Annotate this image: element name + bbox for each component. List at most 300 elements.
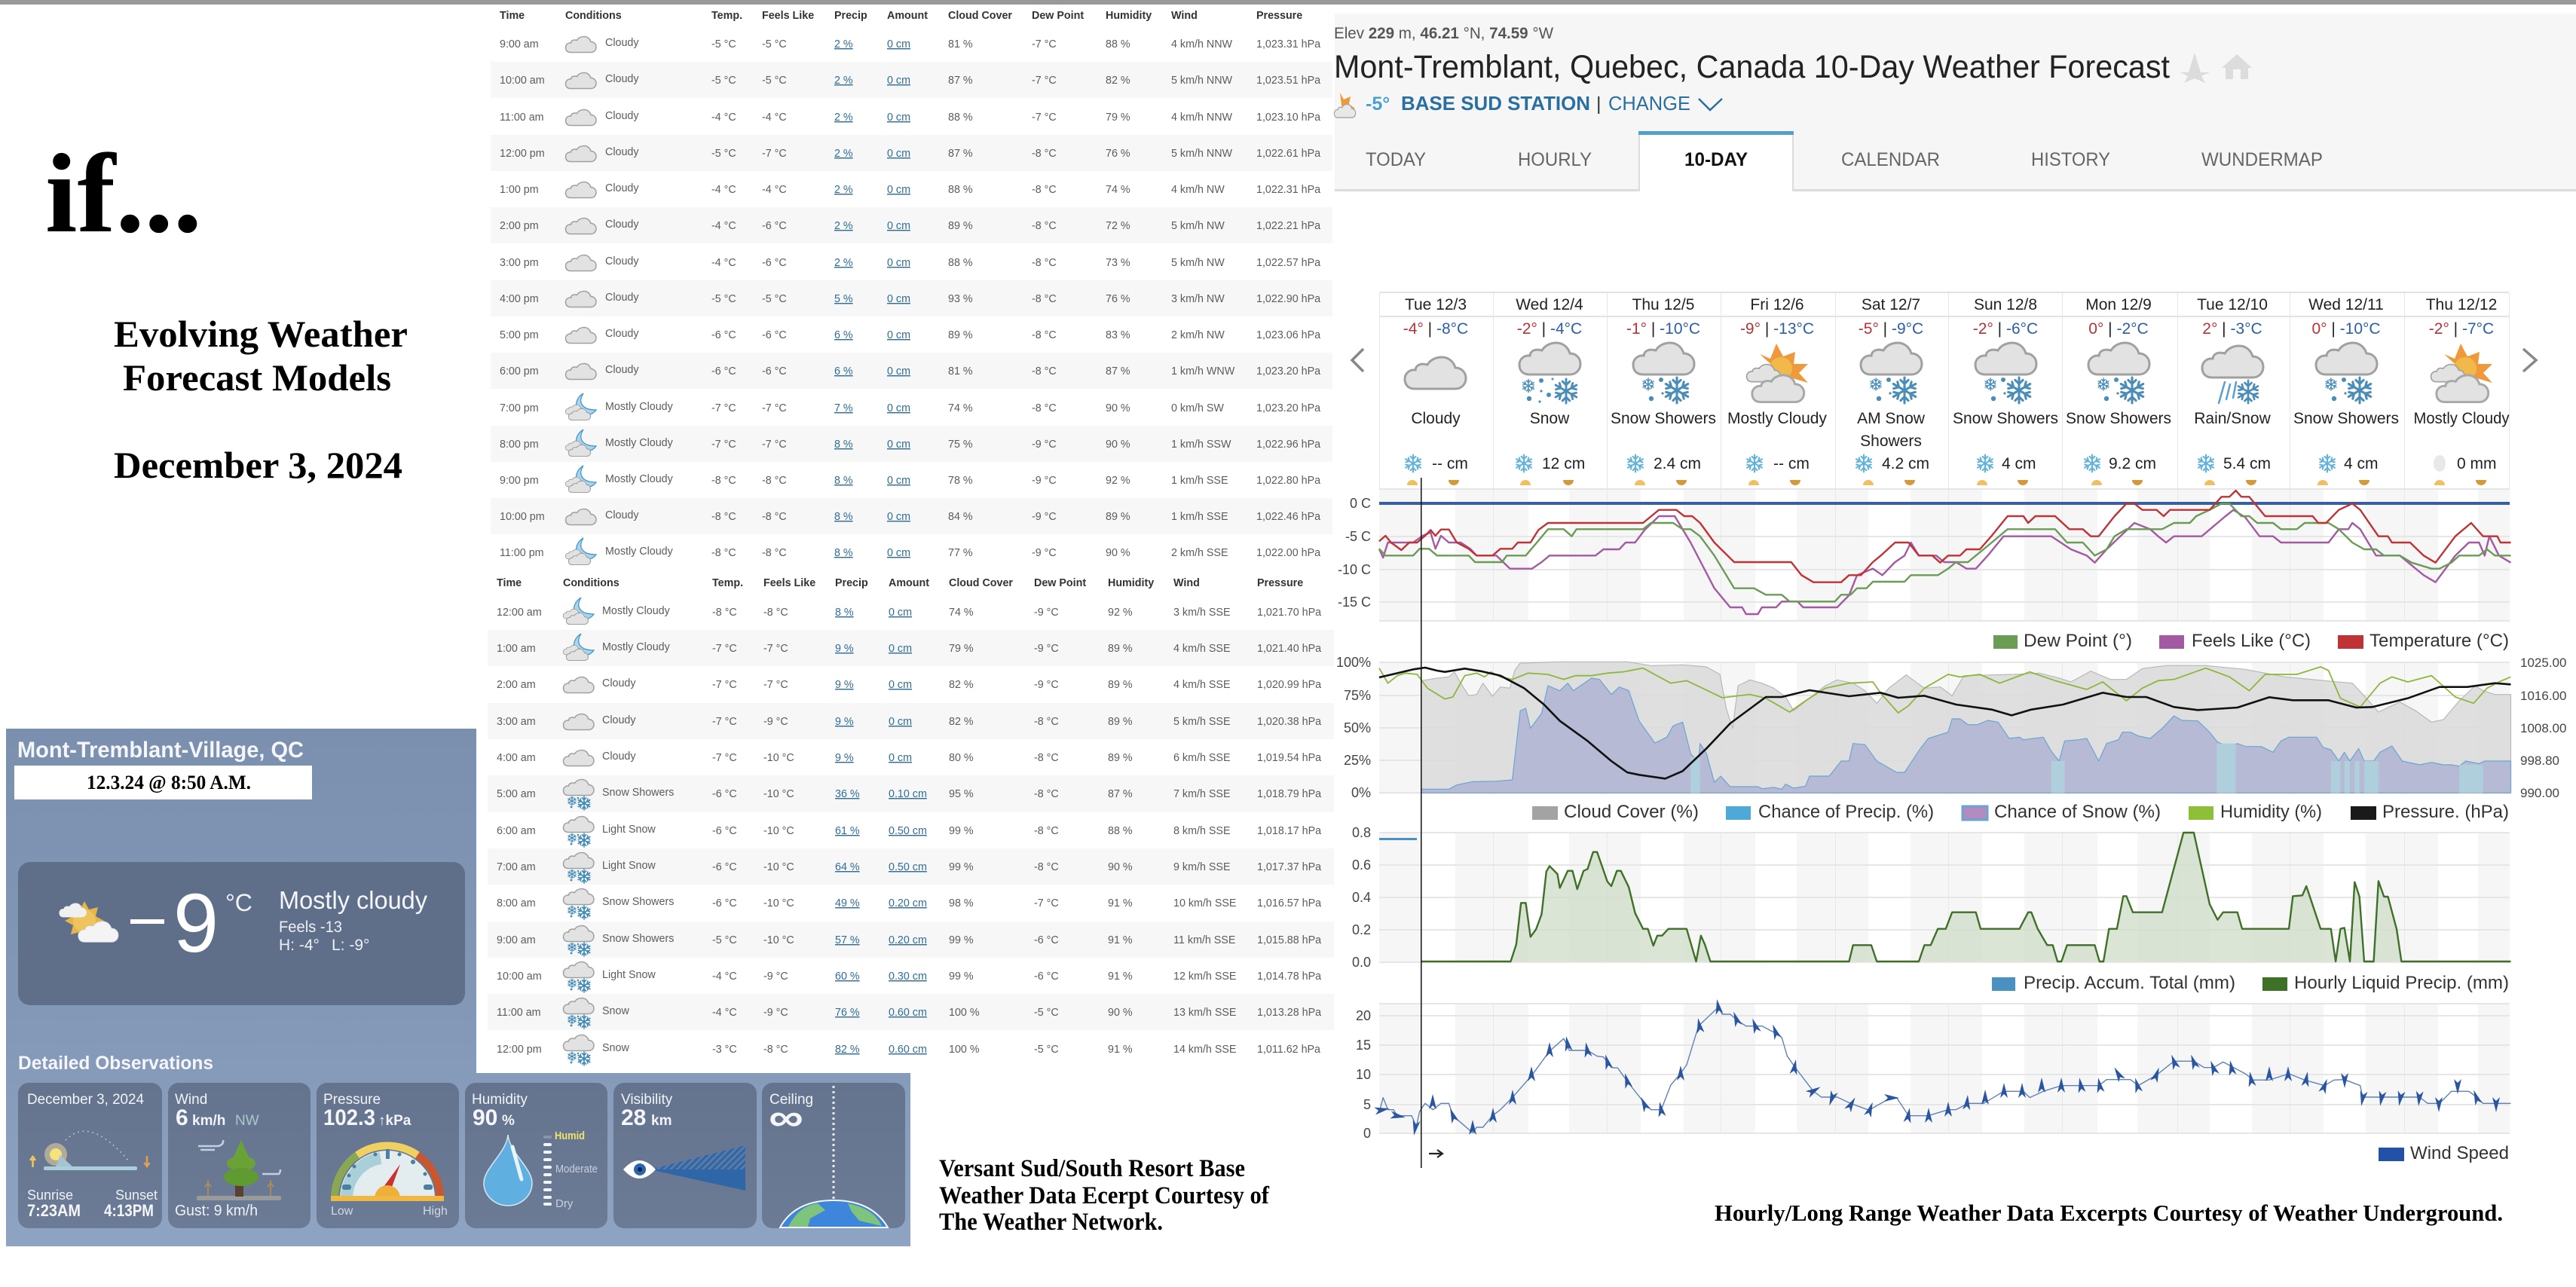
hourly rows 9 am to 11 pm: 2 % bbox=[834, 184, 853, 196]
hourly rows 9 am to 11 pm: -4 °C bbox=[762, 184, 787, 196]
hourly rows 9 am to 11 pm: 77 % bbox=[948, 547, 973, 559]
snow accumulation: 5.4 cm bbox=[2223, 455, 2271, 472]
cloud, precipitation, humidity and pressure chart bbox=[1336, 655, 2566, 822]
hourly rows 12 am to 12 pm: 7:00 am bbox=[497, 861, 536, 873]
hourly rows 12 am to 12 pm: 1,020.38 hPa bbox=[1257, 716, 1321, 728]
hourly rows 9 am to 11 pm: 2 % bbox=[834, 38, 853, 50]
hourly rows 9 am to 11 pm: 72 % bbox=[1106, 220, 1130, 232]
hourly rows 12 am to 12 pm: -9 °C bbox=[763, 971, 788, 983]
heading: Evolving Weather Forecast Models bbox=[114, 313, 408, 399]
high and low temperatures: 2° | -3°C bbox=[2202, 320, 2262, 338]
hourly rows 9 am to 11 pm: 5 km/h NW bbox=[1171, 257, 1225, 269]
high and low temperatures: -9° | -13°C bbox=[1740, 320, 1814, 338]
hourly rows 9 am to 11 pm: 9:00 am bbox=[500, 38, 539, 50]
hourly rows 9 am to 11 pm: 1 km/h SSE bbox=[1171, 475, 1228, 487]
hourly rows 9 am to 11 pm: 78 % bbox=[948, 475, 973, 487]
table header row: Feels Like bbox=[762, 10, 814, 22]
axis labels: -15 C bbox=[1338, 595, 1371, 610]
hourly rows 9 am to 11 pm: 73 % bbox=[1106, 257, 1130, 269]
hourly rows 12 am to 12 pm: 90 % bbox=[1108, 1007, 1133, 1019]
hourly rows 9 am to 11 pm: 11:00 am bbox=[500, 112, 544, 124]
hourly rows 12 am to 12 pm: 0.20 cm bbox=[889, 934, 927, 946]
hourly rows 9 am to 11 pm: 76 % bbox=[1106, 293, 1130, 305]
second table header row: Conditions bbox=[563, 577, 620, 589]
hourly rows 9 am to 11 pm: 81 % bbox=[948, 38, 973, 50]
hourly rows 12 am to 12 pm: -9 °C bbox=[1034, 679, 1059, 691]
hourly rows 9 am to 11 pm: 1,023.51 hPa bbox=[1256, 75, 1320, 87]
hourly rows 12 am to 12 pm: -8 °C bbox=[1034, 788, 1059, 800]
card: sunrise and sunset: 7:23AM bbox=[27, 1201, 81, 1220]
card: pressure: ↑kPa bbox=[378, 1113, 411, 1129]
hourly rows 12 am to 12 pm: 87 % bbox=[1108, 788, 1133, 800]
hourly rows 9 am to 11 pm: -7 °C bbox=[762, 402, 787, 414]
hourly rows 12 am to 12 pm: -6 °C bbox=[712, 788, 737, 800]
hourly rows 9 am to 11 pm: 1,023.20 hPa bbox=[1256, 402, 1320, 414]
hourly rows 9 am to 11 pm: -8 °C bbox=[762, 511, 787, 523]
high and low temperatures: 0° | -10°C bbox=[2311, 320, 2381, 338]
cloud and precipitation legend bbox=[1532, 802, 2509, 822]
hourly rows 12 am to 12 pm: 0.60 cm bbox=[889, 1007, 927, 1019]
hourly rows 9 am to 11 pm: 9:00 pm bbox=[500, 475, 539, 487]
hourly rows 9 am to 11 pm: 2 % bbox=[834, 75, 853, 87]
hourly rows 9 am to 11 pm: -7 °C bbox=[1032, 75, 1057, 87]
hourly rows 9 am to 11 pm: 4 km/h NW bbox=[1171, 184, 1225, 196]
hourly rows 9 am to 11 pm: 0 cm bbox=[887, 329, 910, 341]
hourly rows 9 am to 11 pm: 93 % bbox=[948, 293, 973, 305]
high and low: H: -4° bbox=[279, 937, 320, 954]
hourly rows 12 am to 12 pm: 95 % bbox=[949, 788, 974, 800]
hourly rows 12 am to 12 pm: -10 °C bbox=[763, 861, 794, 873]
axis labels bbox=[1352, 825, 1371, 970]
hourly rows 12 am to 12 pm: 49 % bbox=[835, 897, 860, 909]
hourly rows 12 am to 12 pm: 8 % bbox=[835, 607, 854, 619]
hourly rows 12 am to 12 pm: 89 % bbox=[1108, 716, 1133, 728]
hourly rows 9 am to 11 pm: Cloudy bbox=[605, 73, 639, 85]
hourly rows 12 am to 12 pm: Snow Showers bbox=[602, 933, 674, 945]
hourly rows 9 am to 11 pm: -7 °C bbox=[1032, 112, 1057, 124]
right axis labels: 990.00 bbox=[2520, 786, 2559, 800]
heading: Detailed Observations: Detailed Observations bbox=[18, 1053, 213, 1074]
table header row: Temp. bbox=[711, 10, 742, 22]
hourly rows 9 am to 11 pm: Cloudy bbox=[605, 364, 639, 376]
second table header row: Amount bbox=[889, 577, 929, 589]
hourly rows 9 am to 11 pm: 88 % bbox=[1106, 38, 1130, 50]
hourly rows 9 am to 11 pm: -8 °C bbox=[1032, 257, 1057, 269]
hourly rows 9 am to 11 pm: 89 % bbox=[1106, 511, 1130, 523]
axis labels: 10 bbox=[1356, 1067, 1371, 1082]
hourly rows 9 am to 11 pm: 5 km/h NNW bbox=[1171, 148, 1233, 160]
hourly rows 9 am to 11 pm: -9 °C bbox=[1032, 475, 1057, 487]
accumulation mark bbox=[1379, 838, 1417, 840]
hourly rows 9 am to 11 pm: 5 % bbox=[834, 293, 853, 305]
table header row: Dew Point bbox=[1032, 10, 1084, 22]
condition labels: AM Snow bbox=[1857, 410, 1926, 427]
hourly rows 9 am to 11 pm: 88 % bbox=[948, 112, 973, 124]
hourly rows 9 am to 11 pm: 1,022.31 hPa bbox=[1256, 184, 1320, 196]
hourly rows 9 am to 11 pm: 81 % bbox=[948, 365, 973, 378]
temperature legend: Dew Point (°) bbox=[2024, 631, 2132, 651]
hourly rows 12 am to 12 pm: 99 % bbox=[949, 825, 974, 837]
data lines bbox=[1379, 491, 2510, 614]
hourly rows 12 am to 12 pm: 82 % bbox=[949, 679, 974, 691]
header: Weather Underground location bar bbox=[1334, 14, 2576, 196]
axis labels: 0.0 bbox=[1352, 955, 1371, 970]
card: wind: km/h bbox=[192, 1113, 225, 1129]
heading: Evolving Weather Forecast Models: Forecast Models bbox=[123, 356, 391, 399]
hourly rows 12 am to 12 pm: 2:00 am bbox=[497, 679, 536, 691]
hourly rows 12 am to 12 pm: 11:00 am bbox=[497, 1007, 541, 1019]
hourly rows 9 am to 11 pm: 0 cm bbox=[887, 365, 910, 378]
table header row: Time bbox=[500, 10, 525, 22]
hourly rows 9 am to 11 pm: 2 km/h NW bbox=[1171, 329, 1225, 341]
hourly rows 9 am to 11 pm: 1 km/h SSE bbox=[1171, 511, 1228, 523]
icon: earth dome bbox=[780, 1200, 888, 1227]
hourly rows 9 am to 11 pm: Cloudy bbox=[605, 182, 639, 194]
hourly rows 9 am to 11 pm: -8 °C bbox=[1032, 220, 1057, 232]
hourly rows 12 am to 12 pm: Cloudy bbox=[602, 677, 636, 689]
hourly rows 9 am to 11 pm: 11:00 pm bbox=[500, 547, 544, 559]
hourly rows 12 am to 12 pm: 10 km/h SSE bbox=[1173, 897, 1236, 909]
hourly rows 9 am to 11 pm: 76 % bbox=[1106, 148, 1130, 160]
hourly rows 9 am to 11 pm: 10:00 pm bbox=[500, 511, 545, 523]
hourly rows 9 am to 11 pm: 1,022.57 hPa bbox=[1256, 257, 1320, 269]
hourly rows 9 am to 11 pm: 89 % bbox=[948, 329, 973, 341]
second table header row: Dew Point bbox=[1034, 577, 1086, 589]
hourly rows 9 am to 11 pm: -4 °C bbox=[711, 112, 736, 124]
right axis labels: 1025.00 bbox=[2520, 656, 2566, 670]
date heading: December 3, 2024 bbox=[114, 444, 402, 486]
hourly rows 9 am to 11 pm: 6 % bbox=[834, 329, 853, 341]
hourly rows 12 am to 12 pm: 0.60 cm bbox=[889, 1044, 927, 1056]
hourly rows 12 am to 12 pm: 82 % bbox=[949, 716, 974, 728]
sunrise and sunset markers bbox=[1407, 480, 2486, 485]
hourly rows 9 am to 11 pm: -7 °C bbox=[711, 439, 736, 451]
hourly rows 9 am to 11 pm: 2 % bbox=[834, 112, 853, 124]
table header row: Humidity bbox=[1106, 10, 1152, 22]
hourly rows 12 am to 12 pm: Snow Showers bbox=[602, 787, 674, 799]
hourly rows 12 am to 12 pm: 89 % bbox=[1108, 643, 1133, 655]
panel caption: Weather Data Ecerpt Courtesy of bbox=[939, 1182, 1270, 1209]
left axis labels bbox=[1336, 655, 1371, 800]
hourly rows 12 am to 12 pm: 5 km/h SSE bbox=[1173, 716, 1230, 728]
axis labels: 0.8 bbox=[1352, 825, 1371, 840]
hourly rows 12 am to 12 pm: Cloudy bbox=[602, 750, 636, 763]
hourly rows 9 am to 11 pm: 92 % bbox=[1106, 475, 1130, 487]
hourly rows 12 am to 12 pm: -5 °C bbox=[1034, 1044, 1059, 1056]
card: wind bbox=[168, 1083, 311, 1228]
hourly rows 12 am to 12 pm: 99 % bbox=[949, 971, 974, 983]
hourly rows 12 am to 12 pm: 0.50 cm bbox=[889, 825, 927, 837]
hourly rows 9 am to 11 pm: Mostly Cloudy bbox=[605, 437, 674, 449]
hourly rows 9 am to 11 pm: 1,022.61 hPa bbox=[1256, 148, 1320, 160]
hourly rows 12 am to 12 pm: -3 °C bbox=[712, 1044, 737, 1056]
second table header row: Precip bbox=[835, 577, 868, 589]
hourly rows 9 am to 11 pm: -8 °C bbox=[1032, 365, 1057, 378]
hourly rows 12 am to 12 pm: -10 °C bbox=[763, 825, 794, 837]
hourly rows 9 am to 11 pm: 87 % bbox=[1106, 365, 1130, 378]
hourly rows 12 am to 12 pm: 91 % bbox=[1108, 934, 1133, 946]
hourly rows 9 am to 11 pm: 1,022.46 hPa bbox=[1256, 511, 1320, 523]
hourly rows 9 am to 11 pm: 7 % bbox=[834, 402, 853, 414]
condition labels bbox=[1411, 410, 2510, 450]
hourly rows 12 am to 12 pm: 1:00 am bbox=[497, 643, 536, 655]
tabs: HISTORY bbox=[2031, 149, 2110, 170]
feels like line bbox=[1379, 510, 2510, 614]
condition labels: Mostly Cloudy bbox=[1727, 410, 1827, 427]
hourly rows 12 am to 12 pm: 1,015.88 hPa bbox=[1257, 934, 1321, 946]
hourly rows 9 am to 11 pm: -5 °C bbox=[711, 38, 736, 50]
top grey bar bbox=[0, 0, 2576, 5]
station line: BASE SUD STATION bbox=[1401, 92, 1590, 115]
hourly rows 12 am to 12 pm: 64 % bbox=[835, 861, 860, 873]
condition labels: Snow Showers bbox=[2293, 410, 2399, 427]
hourly rows 12 am to 12 pm: 1,014.78 hPa bbox=[1257, 971, 1321, 983]
hourly rows 12 am to 12 pm: 9 % bbox=[835, 716, 854, 728]
snow accumulation bbox=[1404, 455, 2496, 472]
chance of snow area bbox=[1421, 678, 2510, 793]
hourly rows 12 am to 12 pm: 6 km/h SSE bbox=[1173, 752, 1230, 764]
station line: | bbox=[1596, 93, 1601, 115]
hourly rows 9 am to 11 pm: 1,022.00 hPa bbox=[1256, 547, 1320, 559]
hourly rows 9 am to 11 pm: Mostly Cloudy bbox=[605, 546, 674, 558]
hourly rows 9 am to 11 pm: 6 % bbox=[834, 365, 853, 378]
second table header row: Temp. bbox=[712, 577, 743, 589]
hourly rows 9 am to 11 pm: -5 °C bbox=[762, 75, 787, 87]
condition icons bbox=[565, 36, 596, 564]
second table condition icons bbox=[563, 598, 594, 1065]
hourly rows 9 am to 11 pm: 1,022.90 hPa bbox=[1256, 293, 1320, 305]
hourly rows 12 am to 12 pm: 1,021.40 hPa bbox=[1257, 643, 1321, 655]
day labels: Sun 12/8 bbox=[1974, 296, 2037, 313]
hourly rows 12 am to 12 pm: -6 °C bbox=[712, 897, 737, 909]
pressure line bbox=[1379, 668, 2510, 778]
hourly rows 9 am to 11 pm: Mostly Cloudy bbox=[605, 473, 674, 485]
card: pressure: 102.3 bbox=[323, 1105, 375, 1130]
hourly rows 12 am to 12 pm: Snow Showers bbox=[602, 896, 674, 908]
hourly rows 12 am to 12 pm: Light Snow bbox=[602, 860, 656, 872]
hourly rows 9 am to 11 pm: 10:00 am bbox=[500, 75, 545, 87]
condition labels: Cloudy bbox=[1411, 410, 1461, 427]
hourly rows 9 am to 11 pm: Cloudy bbox=[605, 328, 639, 340]
card: wind: Wind bbox=[175, 1092, 207, 1108]
high and low temperatures bbox=[1403, 320, 2494, 338]
right axis labels bbox=[2520, 656, 2566, 800]
hourly rows 9 am to 11 pm: 12:00 pm bbox=[500, 148, 545, 160]
hourly rows 12 am to 12 pm: 8:00 am bbox=[497, 897, 536, 909]
hourly rows 9 am to 11 pm: 0 cm bbox=[887, 547, 910, 559]
hourly rows 12 am to 12 pm: 60 % bbox=[835, 971, 860, 983]
second table row bands bbox=[488, 630, 1334, 1030]
hourly rows 9 am to 11 pm: 1 km/h WNW bbox=[1171, 365, 1235, 378]
cloud and precipitation legend: Pressure. (hPa) bbox=[2382, 802, 2509, 822]
elevation line: Elev 229 m, 46.21 °N, 74.59 °W bbox=[1334, 25, 1553, 42]
hourly rows 9 am to 11 pm: 1,023.10 hPa bbox=[1256, 112, 1320, 124]
hourly rows 12 am to 12 pm: 9 km/h SSE bbox=[1173, 861, 1230, 873]
hourly rows 12 am to 12 pm: -9 °C bbox=[1034, 643, 1059, 655]
hourly rows 12 am to 12 pm: -8 °C bbox=[763, 607, 788, 619]
snow accumulation: 4 cm bbox=[2344, 455, 2379, 472]
hourly rows 9 am to 11 pm: 1,023.20 hPa bbox=[1256, 365, 1320, 378]
hourly rows 12 am to 12 pm: 7 km/h SSE bbox=[1173, 788, 1230, 800]
station line: CHANGE bbox=[1608, 92, 1690, 115]
precipitation legend: Precip. Accum. Total (mm) bbox=[2024, 973, 2235, 993]
card: wind: 6 bbox=[176, 1105, 188, 1130]
left axis labels: 0% bbox=[1351, 785, 1371, 800]
hourly rows 12 am to 12 pm: -9 °C bbox=[763, 716, 788, 728]
hourly rows 12 am to 12 pm: -7 °C bbox=[712, 752, 737, 764]
hourly rows 9 am to 11 pm bbox=[500, 37, 1320, 559]
hourly rows 9 am to 11 pm: 82 % bbox=[1106, 75, 1130, 87]
hourly rows 9 am to 11 pm: -7 °C bbox=[762, 148, 787, 160]
hourly rows 9 am to 11 pm: -5 °C bbox=[711, 75, 736, 87]
axis labels: 5 bbox=[1363, 1097, 1371, 1112]
hourly rows 12 am to 12 pm: -10 °C bbox=[763, 897, 794, 909]
card: sunrise and sunset: 4:13PM bbox=[104, 1201, 154, 1220]
card: humidity: 90 bbox=[473, 1105, 497, 1130]
hourly rows 12 am to 12 pm: 91 % bbox=[1108, 971, 1133, 983]
card: sunrise and sunset: Sunset bbox=[115, 1188, 158, 1203]
hourly rows 12 am to 12 pm: 0.20 cm bbox=[889, 897, 927, 909]
hourly rows 12 am to 12 pm: -10 °C bbox=[763, 752, 794, 764]
second table header row: Feels Like bbox=[763, 577, 815, 589]
feels like: Feels -13 bbox=[279, 919, 342, 936]
temperature line chart bbox=[1338, 489, 2510, 651]
hourly rows 9 am to 11 pm: 8 % bbox=[834, 547, 853, 559]
card: visibility bbox=[613, 1083, 757, 1228]
axis labels: 0.2 bbox=[1352, 922, 1371, 937]
wind speed chart bbox=[1356, 998, 2510, 1163]
hourly rows 12 am to 12 pm: -10 °C bbox=[763, 788, 794, 800]
day labels: Sat 12/7 bbox=[1862, 296, 1920, 313]
snow accumulation: 9.2 cm bbox=[2109, 455, 2156, 472]
snow accumulation: 4.2 cm bbox=[1882, 455, 1929, 472]
hourly rows 9 am to 11 pm: 0 cm bbox=[887, 475, 910, 487]
hourly rows 9 am to 11 pm: 83 % bbox=[1106, 329, 1130, 341]
wind speed legend: Wind Speed bbox=[2410, 1143, 2509, 1163]
hourly rows 9 am to 11 pm: 0 cm bbox=[887, 511, 910, 523]
cloud and precipitation legend: Cloud Cover (%) bbox=[1564, 802, 1699, 822]
hourly rows 9 am to 11 pm: 0 cm bbox=[887, 257, 910, 269]
day labels: Thu 12/5 bbox=[1632, 296, 1694, 313]
snow accumulation: 12 cm bbox=[1542, 455, 1585, 472]
row bands bbox=[491, 62, 1332, 534]
hourly rows 9 am to 11 pm: -9 °C bbox=[1032, 439, 1057, 451]
hourly rows 12 am to 12 pm: Cloudy bbox=[602, 714, 636, 726]
hourly rows 9 am to 11 pm: 5:00 pm bbox=[500, 329, 539, 341]
hourly rows 12 am to 12 pm: 91 % bbox=[1108, 897, 1133, 909]
zero degree line bbox=[1379, 502, 2510, 505]
timestamp box: 12.3.24 @ 8:50 A.M. bbox=[87, 772, 251, 793]
hourly rows 12 am to 12 pm: 12:00 am bbox=[497, 607, 542, 619]
hourly rows 12 am to 12 pm: 90 % bbox=[1108, 861, 1133, 873]
tabs: HOURLY bbox=[1518, 149, 1592, 170]
hourly rows 12 am to 12 pm: 1,017.37 hPa bbox=[1257, 861, 1321, 873]
hourly rows 12 am to 12 pm: -8 °C bbox=[1034, 861, 1059, 873]
card: visibility: 28 bbox=[621, 1105, 646, 1130]
hourly rows 9 am to 11 pm: 2 % bbox=[834, 220, 853, 232]
hourly rows 9 am to 11 pm: -8 °C bbox=[762, 547, 787, 559]
hourly rows 9 am to 11 pm: -4 °C bbox=[711, 257, 736, 269]
table header row: Precip bbox=[834, 10, 867, 22]
hourly rows 9 am to 11 pm: -6 °C bbox=[711, 365, 736, 378]
station line bbox=[1366, 92, 1722, 115]
hourly rows 12 am to 12 pm: 4 km/h SSE bbox=[1173, 679, 1230, 691]
left axis labels: 100% bbox=[1336, 655, 1371, 670]
snow accumulation: -- cm bbox=[1773, 455, 1810, 472]
hourly rows 12 am to 12 pm: -8 °C bbox=[1034, 716, 1059, 728]
hourly rows 12 am to 12 pm: 98 % bbox=[949, 897, 974, 909]
hourly rows 12 am to 12 pm: 14 km/h SSE bbox=[1173, 1044, 1236, 1056]
cloud cover area bbox=[1421, 662, 2510, 793]
high and low temperatures: -2° | -4°C bbox=[1517, 320, 1582, 338]
high and low: L: -9° bbox=[332, 937, 369, 954]
snow accumulation: 0 mm bbox=[2457, 455, 2496, 472]
hourly rows 9 am to 11 pm: Cloudy bbox=[605, 110, 639, 122]
hourly table: Dec 3 bbox=[491, 10, 1332, 564]
hourly rows 12 am to 12 pm: 9 % bbox=[835, 679, 854, 691]
day labels bbox=[1405, 296, 2497, 313]
axis labels: 15 bbox=[1356, 1038, 1371, 1053]
hourly rows 12 am to 12 pm: -4 °C bbox=[712, 1007, 737, 1019]
high and low temperatures: -2° | -7°C bbox=[2429, 320, 2494, 338]
cloud and precipitation legend: Chance of Snow (%) bbox=[1994, 802, 2161, 822]
hourly rows 12 am to 12 pm: 0.10 cm bbox=[889, 788, 927, 800]
hourly rows 12 am to 12 pm bbox=[497, 605, 1321, 1056]
hourly rows 9 am to 11 pm: -9 °C bbox=[1032, 511, 1057, 523]
hourly rows 9 am to 11 pm: -4 °C bbox=[711, 220, 736, 232]
hourly rows 9 am to 11 pm: -5 °C bbox=[762, 293, 787, 305]
hourly rows 9 am to 11 pm: 0 cm bbox=[887, 38, 910, 50]
hourly rows 12 am to 12 pm: 57 % bbox=[835, 934, 860, 946]
hourly rows 12 am to 12 pm: 1,018.79 hPa bbox=[1257, 788, 1321, 800]
card: wind: NW bbox=[235, 1113, 259, 1129]
hourly rows 9 am to 11 pm: 88 % bbox=[948, 184, 973, 196]
precipitation chart bbox=[1352, 825, 2510, 993]
icon: pine tree bbox=[197, 1140, 281, 1200]
hourly rows 9 am to 11 pm: 5 km/h NNW bbox=[1171, 75, 1233, 87]
humidity scale: Humid bbox=[555, 1130, 585, 1142]
hourly rows 9 am to 11 pm: 74 % bbox=[1106, 184, 1130, 196]
right axis labels: 1016.00 bbox=[2520, 689, 2566, 703]
hourly rows 12 am to 12 pm: Mostly Cloudy bbox=[602, 641, 671, 653]
hourly rows 9 am to 11 pm: 89 % bbox=[948, 220, 973, 232]
hourly rows 12 am to 12 pm: -8 °C bbox=[1034, 825, 1059, 837]
hourly rows 12 am to 12 pm: 1,019.54 hPa bbox=[1257, 752, 1321, 764]
condition labels: Snow bbox=[1530, 410, 1570, 427]
hourly rows 9 am to 11 pm: Cloudy bbox=[605, 509, 639, 521]
humidity scale: Moderate bbox=[555, 1163, 598, 1175]
temperature legend: Temperature (°C) bbox=[2369, 631, 2509, 651]
card: visibility: km bbox=[651, 1113, 672, 1129]
arrow: time marker bbox=[1429, 1150, 1442, 1157]
station name: Mont-Tremblant-Village, QC bbox=[17, 738, 304, 763]
hourly rows 12 am to 12 pm: 0 cm bbox=[889, 716, 912, 728]
hourly rows 9 am to 11 pm: -5 °C bbox=[762, 38, 787, 50]
station line: -5° bbox=[1366, 93, 1390, 115]
hourly rows 12 am to 12 pm: 76 % bbox=[835, 1007, 860, 1019]
hourly rows 12 am to 12 pm: 0 cm bbox=[889, 643, 912, 655]
card: visibility: Visibility bbox=[621, 1092, 673, 1108]
wind direction markers bbox=[1374, 998, 2500, 1136]
hourly rows 12 am to 12 pm: Snow bbox=[602, 1042, 629, 1054]
hourly rows 12 am to 12 pm: Snow bbox=[602, 1005, 629, 1017]
chance of precipitation patches bbox=[1690, 744, 2483, 793]
hourly rows 9 am to 11 pm: 0 cm bbox=[887, 293, 910, 305]
dew point line bbox=[1379, 503, 2510, 601]
cloud and precipitation legend: Chance of Precip. (%) bbox=[1758, 802, 1934, 822]
table header row: Amount bbox=[887, 10, 928, 22]
hourly rows 9 am to 11 pm: 2 % bbox=[834, 257, 853, 269]
